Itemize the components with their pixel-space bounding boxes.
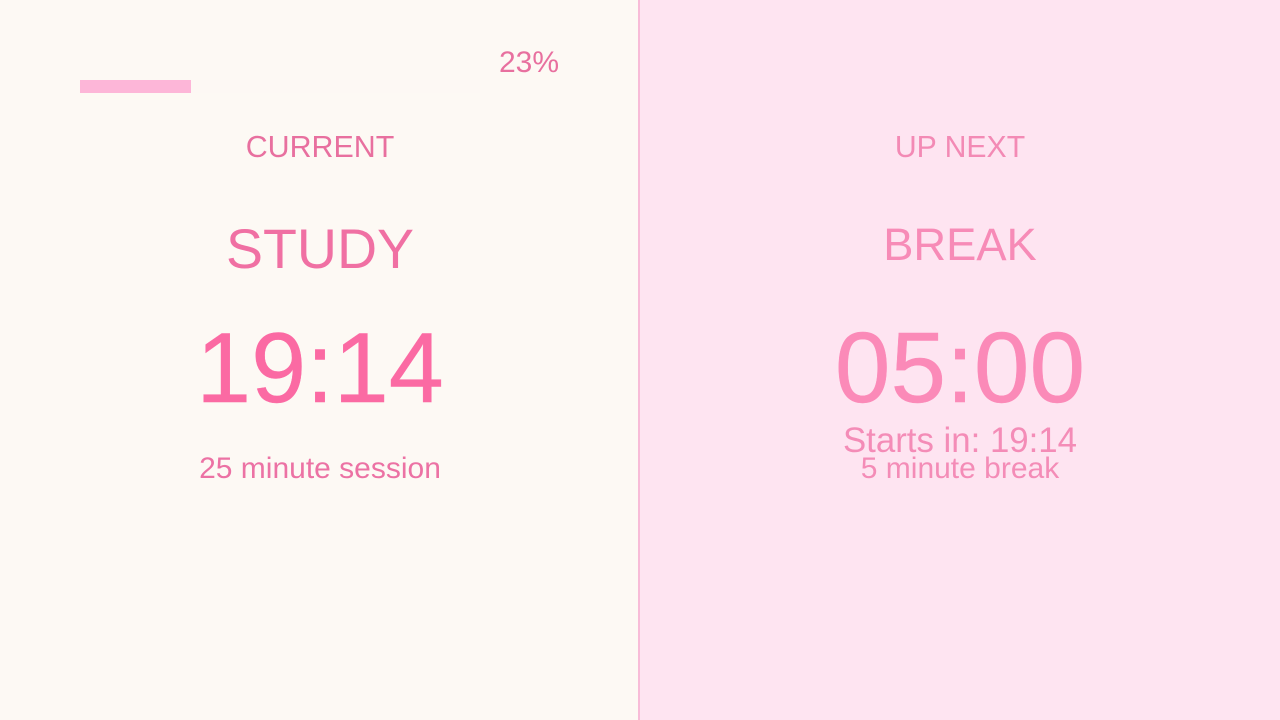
progress percentage: 23% [499, 46, 559, 79]
panel divider [638, 0, 640, 720]
session name: study: STUDY [226, 218, 414, 280]
session name: break: BREAK [883, 219, 1037, 270]
heading: up next: UP NEXT [895, 131, 1025, 164]
heading: current: CURRENT [246, 130, 394, 164]
panel: up next [640, 0, 1280, 720]
session description: 25 minute session [199, 452, 441, 485]
break description: 5 minute break [861, 452, 1059, 485]
starts in countdown: Starts in: 19:14 [843, 421, 1077, 460]
current timer: 19:14 [196, 312, 444, 423]
progress fill [80, 80, 191, 93]
panel: current session [0, 0, 638, 720]
progress track [80, 80, 480, 93]
next timer: 05:00 [835, 312, 1085, 424]
